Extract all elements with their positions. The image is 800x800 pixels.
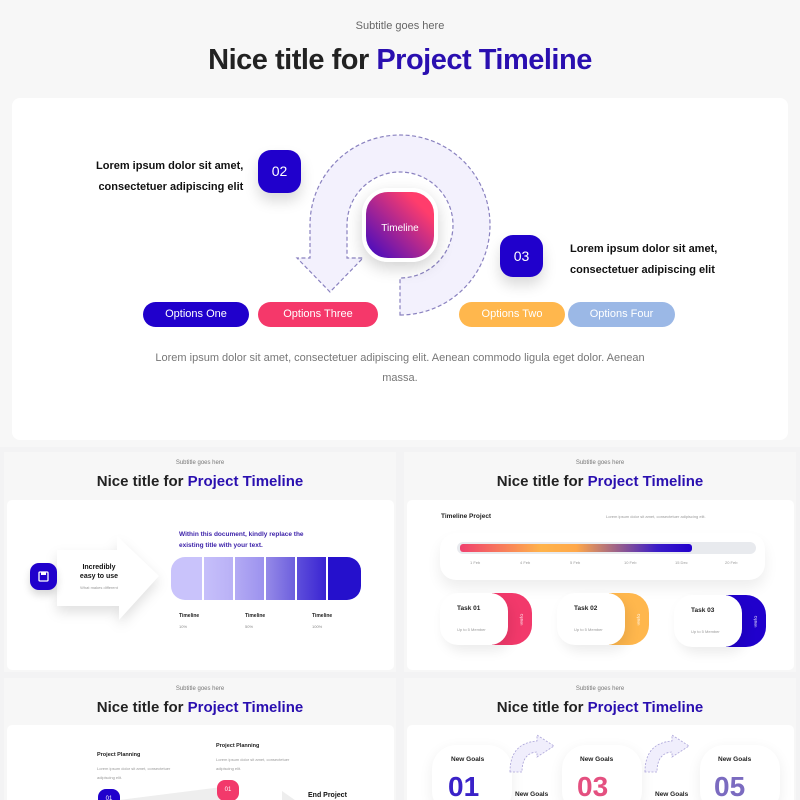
text block left: Lorem ipsum dolor sit amet, bbox=[96, 160, 243, 172]
main card bbox=[12, 98, 788, 440]
badge 01 pink bbox=[217, 780, 239, 800]
card: New Goals bbox=[718, 756, 751, 763]
pill options three bbox=[258, 302, 378, 327]
progress card: 10 Feb bbox=[624, 560, 636, 565]
task 03: Up to 5 Member bbox=[691, 629, 720, 634]
card: 100% bbox=[312, 624, 322, 629]
card bbox=[7, 500, 394, 670]
pill options one bbox=[143, 302, 249, 327]
card: adipiscing elit. bbox=[216, 766, 241, 771]
task 03 bbox=[680, 595, 766, 654]
card: Timeline bbox=[245, 613, 265, 619]
pill options one: Options One bbox=[165, 308, 227, 320]
text block left: consectetuer adipiscing elit bbox=[98, 181, 243, 193]
badge 03: 03 bbox=[514, 248, 529, 264]
task 02: Up to 5 Member bbox=[574, 627, 603, 632]
badge 01 blue bbox=[98, 789, 120, 800]
task 01 bbox=[446, 593, 532, 652]
segmented bar bbox=[171, 557, 361, 600]
pill options two: Options Two bbox=[482, 308, 542, 320]
card: adipiscing elit. bbox=[97, 775, 122, 780]
badge 01 pink: 01 bbox=[225, 787, 231, 793]
card: Project Planning bbox=[216, 743, 259, 749]
text: incredibly easy: easy to use bbox=[80, 573, 118, 580]
text block right: Lorem ipsum dolor sit amet, bbox=[570, 243, 717, 255]
card: What makes different bbox=[80, 585, 118, 590]
panel: bottom-right slide bbox=[404, 678, 796, 800]
card: Lorem ipsum dolor sit amet, consectetuer bbox=[97, 766, 170, 771]
pill options four: Options Four bbox=[590, 308, 653, 320]
card: 50% bbox=[245, 624, 253, 629]
card: Lorem ipsum dolor sit amet, consectetuer bbox=[216, 757, 289, 762]
progress card: 4 Feb bbox=[520, 560, 530, 565]
icon: save bbox=[30, 563, 57, 590]
paragraph: Lorem ipsum dolor sit amet, consectetuer adipiscing elit. Aenean commodo ligula eget dolor. Aenean massa. bbox=[155, 352, 645, 384]
pill options three: Options Three bbox=[283, 308, 353, 320]
heading blue: Within this document, kindly replace the bbox=[179, 531, 304, 538]
task 02: Task 02 bbox=[574, 605, 597, 612]
card: Timeline Project bbox=[441, 513, 491, 520]
card: New Goals bbox=[515, 791, 548, 798]
card: Timeline bbox=[312, 613, 332, 619]
badge 02: 02 bbox=[272, 163, 287, 179]
panel: top-left slide bbox=[4, 452, 396, 672]
task 01: Option bbox=[519, 614, 524, 625]
panel: bottom-left slide bbox=[4, 678, 396, 800]
task 01: Up to 5 Member bbox=[457, 627, 486, 632]
title: Nice title for Project Timeline bbox=[497, 699, 703, 716]
card bbox=[7, 725, 394, 800]
card bbox=[407, 500, 794, 670]
badge 02 bbox=[258, 150, 301, 193]
task 03: Option bbox=[753, 616, 758, 627]
progress card: 20 Feb bbox=[725, 560, 737, 565]
heading blue bbox=[179, 531, 304, 549]
timeline labels: Timeline bbox=[179, 613, 199, 619]
card: 10% bbox=[179, 624, 187, 629]
task 03: Task 03 bbox=[691, 607, 714, 614]
progress card: 15 Dec bbox=[675, 560, 688, 565]
subtitle: Subtitle goes here bbox=[176, 460, 224, 466]
circular arrow bbox=[296, 134, 491, 316]
text: incredibly easy bbox=[80, 564, 118, 580]
card: New Goals bbox=[580, 756, 613, 763]
title: Nice title for Project Timeline bbox=[497, 473, 703, 490]
card: Lorem ipsum dolor sit amet, consectetuer adipiscing elit. bbox=[606, 514, 706, 519]
text block left bbox=[96, 160, 244, 193]
subtitle: Subtitle goes here bbox=[356, 20, 444, 32]
subtitle: Subtitle goes here bbox=[576, 686, 624, 692]
subtitle: Subtitle goes here bbox=[176, 686, 224, 692]
text block right: consectetuer adipiscing elit bbox=[570, 264, 715, 276]
center timeline box bbox=[362, 188, 438, 262]
heading blue: existing title with your text. bbox=[179, 542, 263, 549]
title: Nice title for Project Timeline bbox=[97, 473, 303, 490]
center timeline box: Timeline bbox=[381, 223, 419, 234]
text block right bbox=[570, 243, 717, 276]
title: Nice title for Project Timeline bbox=[208, 44, 592, 76]
title: Nice title for Project Timeline bbox=[97, 699, 303, 716]
top background panel bbox=[0, 0, 800, 447]
card: End Project bbox=[308, 792, 347, 799]
badge 03 bbox=[500, 235, 543, 277]
text: incredibly easy: Incredibly bbox=[82, 564, 116, 571]
progress card: 5 Feb bbox=[570, 560, 580, 565]
card: New Goals bbox=[655, 791, 688, 798]
curved arrows bbox=[510, 734, 689, 772]
arrow shape bbox=[54, 546, 158, 622]
task 01: Task 01 bbox=[457, 605, 480, 612]
progress card bbox=[440, 533, 765, 580]
card bbox=[407, 725, 794, 800]
task 02: Option bbox=[636, 614, 641, 625]
card: New Goals bbox=[451, 756, 484, 763]
panel: top-right slide bbox=[404, 452, 796, 672]
card: Project Planning bbox=[97, 752, 140, 758]
task 02 bbox=[564, 593, 649, 652]
subtitle: Subtitle goes here bbox=[576, 460, 624, 466]
progress card: 1 Feb bbox=[470, 560, 480, 565]
pill options two bbox=[459, 302, 565, 327]
pill options four bbox=[568, 302, 675, 327]
